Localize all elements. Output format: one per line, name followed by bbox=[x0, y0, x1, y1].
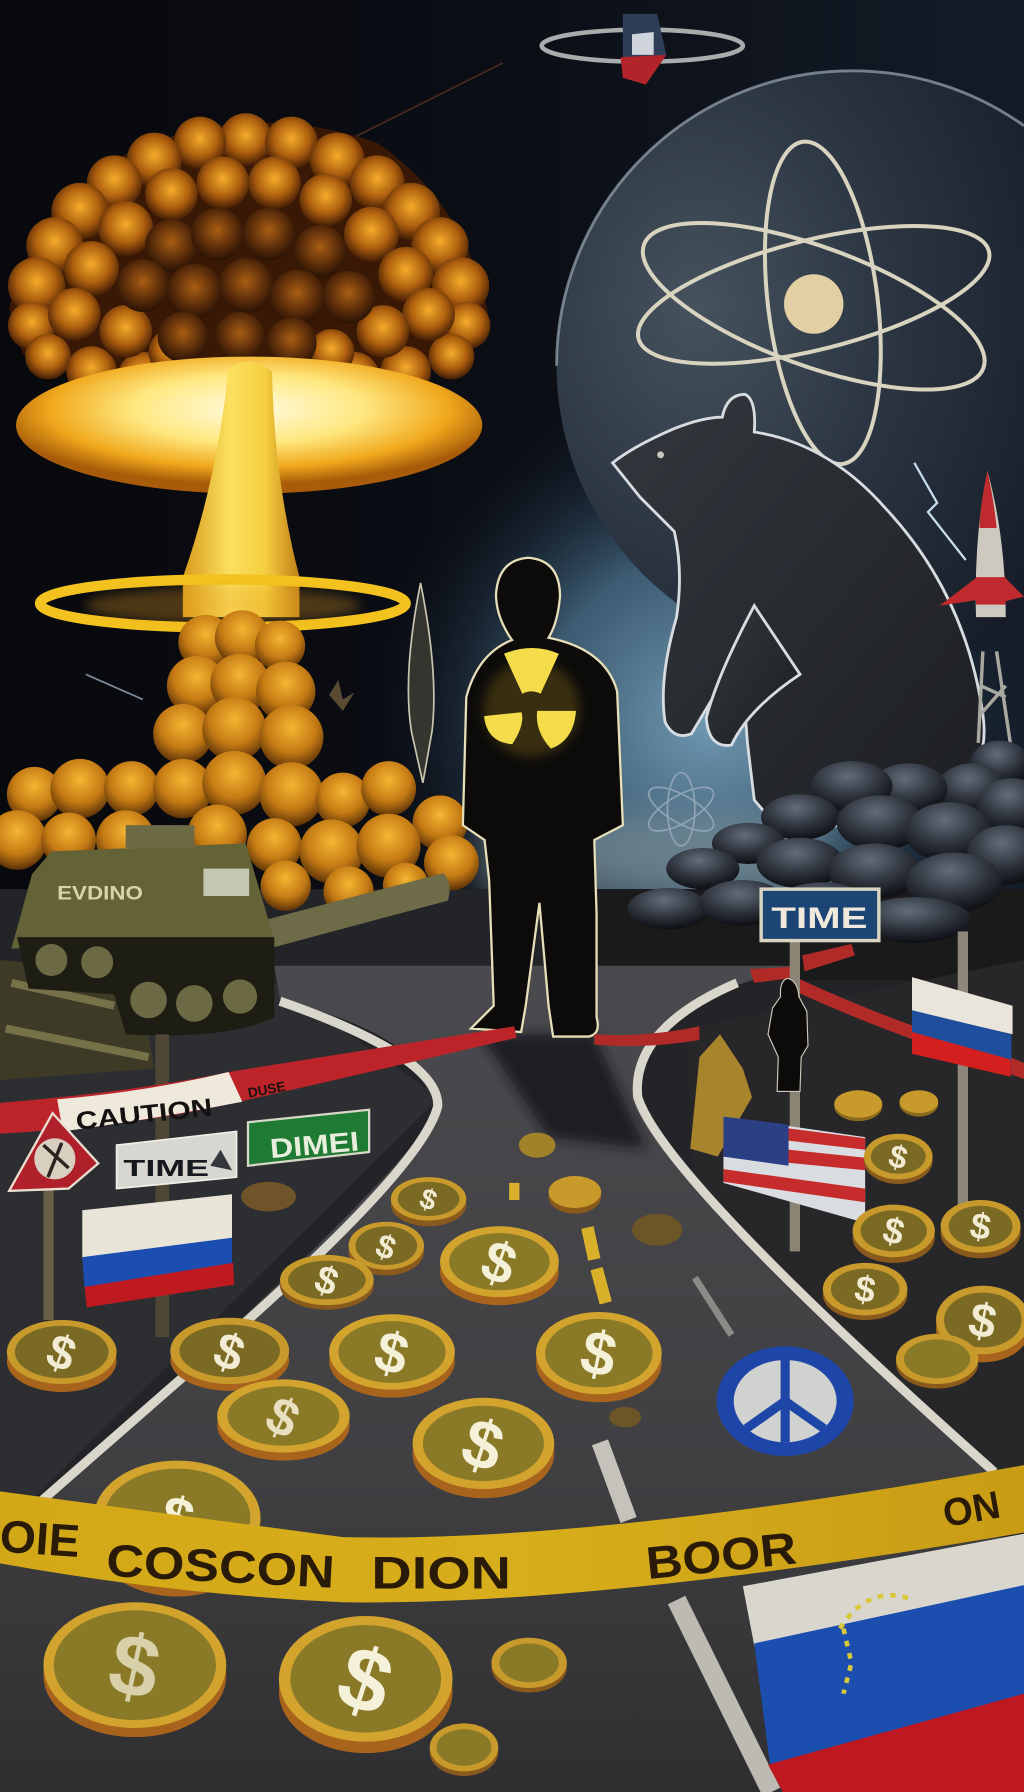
coin bbox=[936, 1286, 1024, 1362]
coin bbox=[7, 1320, 117, 1392]
coin: $ bbox=[415, 1182, 441, 1218]
coin bbox=[391, 1177, 466, 1226]
yellow caution tape bbox=[0, 1465, 1024, 1602]
russian flag right bbox=[912, 977, 1013, 1077]
bear body and head bbox=[613, 394, 984, 840]
radiation symbol bbox=[484, 648, 576, 749]
tape lettering bbox=[0, 1484, 1004, 1599]
tank window bbox=[203, 869, 249, 896]
tank barrel bbox=[265, 873, 450, 949]
atom symbol bbox=[624, 135, 1004, 471]
centre line markings bbox=[514, 1183, 771, 1792]
tape lettering: DION bbox=[371, 1548, 511, 1599]
coin bbox=[280, 1255, 374, 1310]
coin bbox=[853, 1205, 935, 1263]
gold debris pile bbox=[690, 1034, 752, 1157]
mushroom cloud stem bbox=[183, 362, 299, 617]
bear front arm bbox=[706, 606, 800, 745]
coin bbox=[823, 1263, 907, 1320]
mushroom cloud skirt bbox=[16, 357, 482, 494]
warning sign with clock bbox=[9, 1113, 98, 1320]
coin: $ bbox=[473, 1228, 525, 1299]
coin bbox=[864, 1134, 933, 1184]
small silhouette walker bbox=[768, 978, 808, 1091]
coin: $ bbox=[885, 1137, 912, 1177]
tank hull lettering: EVDINO bbox=[57, 882, 143, 904]
dime sign: DIMEI bbox=[269, 1125, 360, 1164]
coin bbox=[440, 1226, 559, 1305]
coin: $ bbox=[453, 1402, 513, 1487]
coin: $ bbox=[967, 1204, 994, 1248]
coin: $ bbox=[879, 1208, 909, 1253]
coin bbox=[170, 1318, 289, 1391]
coin: $ bbox=[852, 1267, 879, 1311]
tape lettering: BOOR bbox=[644, 1523, 799, 1589]
coin: $ bbox=[371, 1227, 401, 1268]
dark smoke clouds bbox=[627, 741, 1024, 943]
gold coins bbox=[7, 1090, 1024, 1776]
coin: $ bbox=[575, 1317, 623, 1392]
russian flag left bbox=[82, 1194, 234, 1307]
tank bbox=[0, 825, 450, 1080]
bear nose bbox=[657, 451, 664, 458]
sky background bbox=[0, 0, 1024, 1029]
tape lettering: ON bbox=[940, 1484, 1004, 1536]
time sign left: TIME bbox=[123, 1155, 209, 1181]
lightning bolt bbox=[914, 463, 966, 560]
sign post left bbox=[155, 1034, 169, 1337]
time sign right bbox=[761, 889, 879, 1251]
figure shadow bbox=[480, 1034, 646, 1149]
peace symbol bbox=[717, 1346, 854, 1456]
road bbox=[0, 966, 1024, 1792]
us flag bbox=[723, 1117, 865, 1223]
silhouette figure bbox=[463, 558, 623, 1037]
ground fireball clouds bbox=[0, 751, 479, 917]
small atom bbox=[643, 773, 720, 846]
coin bbox=[834, 1090, 882, 1121]
coin: $ bbox=[101, 1614, 168, 1719]
mushroom cloud ring bbox=[40, 579, 406, 627]
planet bbox=[557, 71, 1024, 661]
coin bbox=[329, 1314, 455, 1398]
standalone missile bbox=[408, 583, 434, 783]
coin: $ bbox=[326, 1625, 404, 1735]
small drone in the sky bbox=[329, 680, 354, 711]
ground bbox=[0, 889, 1024, 1792]
orbiting satellite ring bbox=[542, 14, 743, 85]
tank hull bbox=[11, 843, 274, 949]
mushroom cloud cap bbox=[8, 113, 490, 406]
mushroom cloud bbox=[0, 113, 490, 917]
time sign right: TIME bbox=[771, 902, 867, 935]
bear bbox=[613, 394, 984, 840]
russian flag bottom right bbox=[743, 1534, 1024, 1792]
coin bbox=[217, 1379, 350, 1461]
coin: $ bbox=[207, 1320, 252, 1383]
red caution tape right bbox=[594, 944, 1024, 1079]
red and white caution tape left bbox=[0, 1026, 517, 1136]
radiation glow bbox=[483, 661, 579, 757]
tape lettering: COSCON bbox=[105, 1535, 336, 1598]
coin bbox=[896, 1334, 978, 1389]
right rocket on tower bbox=[939, 471, 1024, 743]
lower stem billows bbox=[153, 610, 323, 769]
coin bbox=[279, 1616, 453, 1753]
caution tape lettering: CAUTION bbox=[74, 1094, 214, 1136]
coin bbox=[349, 1222, 424, 1275]
coin: $ bbox=[40, 1324, 83, 1383]
tape lettering: OIE bbox=[0, 1511, 82, 1567]
road debris bbox=[519, 1133, 682, 1427]
debris coin left bbox=[241, 1182, 296, 1211]
coin: $ bbox=[309, 1257, 344, 1305]
coin bbox=[94, 1461, 261, 1597]
red and white caution tape left: DUSE bbox=[247, 1079, 287, 1101]
coin bbox=[43, 1602, 226, 1737]
coin bbox=[899, 1090, 938, 1117]
coin bbox=[941, 1200, 1021, 1258]
coin: $ bbox=[964, 1293, 1001, 1350]
time sign left bbox=[117, 1131, 237, 1189]
tank tracks bbox=[17, 937, 274, 1035]
coin: $ bbox=[368, 1318, 415, 1389]
coin: $ bbox=[257, 1385, 308, 1451]
coin bbox=[413, 1398, 554, 1498]
coin: $ bbox=[153, 1483, 201, 1553]
russian flag right post bbox=[958, 931, 968, 1206]
coin bbox=[491, 1638, 567, 1693]
coin bbox=[430, 1723, 498, 1776]
coin bbox=[536, 1312, 662, 1402]
coin bbox=[549, 1176, 601, 1214]
tank debris bbox=[0, 960, 154, 1080]
dime sign bbox=[248, 1110, 369, 1166]
road edge lines bbox=[0, 1001, 438, 1537]
